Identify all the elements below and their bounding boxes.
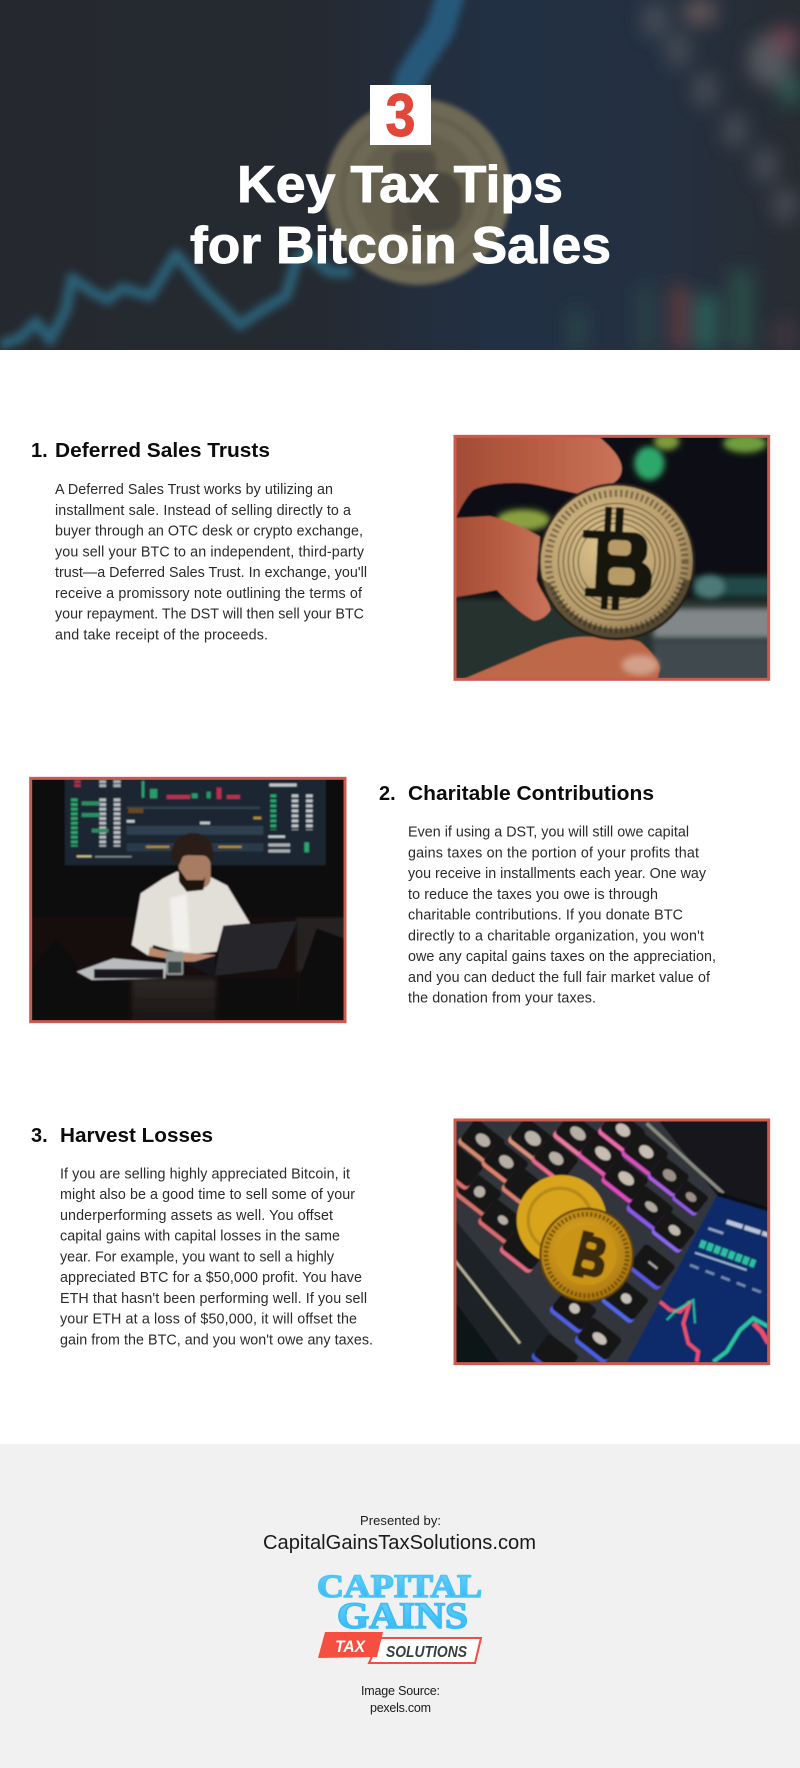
text block: tip 3 body: capital gains with capital losses in the same [60, 1229, 340, 1245]
title: Key Tax Tips [237, 156, 563, 214]
text block: tip 2 body: directly to a charitable organization, you won't [408, 928, 704, 944]
text: image source: pexels.com [370, 1701, 431, 1715]
text block: tip 2 body: the donation from your taxes. [408, 991, 596, 1007]
text block: tip 2 body [408, 824, 716, 1007]
logo: Capital Gains Tax Solutions: TAX [335, 1637, 367, 1656]
text block: tip 3 body: year. For example, you want to sell a highly [60, 1249, 335, 1265]
image: blurred bokeh ticker dots [641, 0, 800, 223]
text block: tip 1 body: receive a promissory note outlining the terms of [55, 586, 362, 602]
heading: tip 3: Harvest Losses [60, 1125, 213, 1147]
image: hand holding bitcoin [454, 434, 770, 681]
logo: Capital Gains Tax Solutions: GAINS [337, 1596, 468, 1637]
text block: tip 1 body: your repayment. The DST will then sell your BTC [55, 607, 364, 623]
heading: tip 1: Deferred Sales Trusts [55, 440, 270, 462]
text block: tip 1 body: and take receipt of the proceeds. [55, 627, 268, 643]
panel: tip 1 text [31, 440, 367, 643]
text block: tip 2 body: owe any capital gains taxes on the appreciation, [408, 949, 716, 965]
image: blurred candlesticks [570, 270, 795, 350]
panel: tip 3 text [31, 1125, 373, 1348]
text block: tip 3 body: ETH that hasn't been performing well. If you sell [60, 1291, 367, 1307]
text block: tip 3 body: might also be a good time to sell some of your [60, 1187, 355, 1203]
chart line: blurred blue market trace [0, 0, 452, 345]
panel: hero header [0, 0, 800, 350]
text block: tip 1 body: trust—a Deferred Sales Trust. In exchange, you'll [55, 565, 367, 581]
icon group: keyboard keys [435, 1108, 709, 1381]
text block: tip 2 body: to reduce the taxes you owe is through [408, 887, 658, 903]
image: man at laptop with trading screen [23, 772, 353, 1028]
heading: tip 2: Charitable Contributions [408, 783, 654, 805]
monitor: trading data [74, 782, 309, 857]
text block: tip 1 body: you sell your BTC to an independent, third-party [55, 544, 365, 560]
panel: tip 2 text [379, 783, 716, 1007]
title [190, 156, 611, 275]
heading: tip 3: 3. [31, 1125, 48, 1147]
panel: footer [0, 1444, 800, 1768]
text: image source: Image Source: [361, 1684, 440, 1698]
image: bitcoin on backlit keyboard with phone [454, 1118, 770, 1366]
text block: tip 1 body: A Deferred Sales Trust works by utilizing an [55, 482, 333, 498]
icon: bitcoin mark on coin [579, 506, 655, 612]
image: blurred bitcoin coin [325, 99, 511, 285]
text block: tip 2 body: Even if using a DST, you will still owe capital [408, 824, 689, 840]
text block: tip 3 body: gain from the BTC, and you won't owe any taxes. [60, 1332, 373, 1348]
text block: tip 1 body [55, 482, 367, 643]
text block: tip 2 body: gains taxes on the portion of your profits that [408, 845, 699, 861]
badge: number 3 [370, 82, 431, 149]
text block: tip 1 body: buyer through an OTC desk or crypto exchange, [55, 524, 363, 540]
heading: tip 1: 1. [31, 440, 48, 462]
text block: tip 1 body: installment sale. Instead of selling directly to a [55, 503, 351, 519]
badge: number 3: 3 [386, 82, 416, 149]
text: presented by: Presented by: [360, 1513, 441, 1528]
text block: tip 3 body: If you are selling highly appreciated Bitcoin, it [60, 1166, 350, 1182]
logo: Capital Gains Tax Solutions: CAPITAL [317, 1569, 482, 1605]
text block: tip 3 body [60, 1166, 373, 1348]
text block: tip 2 body: and you can deduct the full fair market value of [408, 970, 710, 986]
text block: tip 3 body: underperforming assets as well. You offset [60, 1208, 333, 1224]
text block: tip 2 body: you receive in installments each year. One way [408, 866, 707, 882]
heading: tip 2: 2. [379, 783, 396, 805]
text block: tip 2 body: charitable contributions. If you donate BTC [408, 908, 683, 924]
text: image source [361, 1684, 440, 1715]
text: website: CapitalGainsTaxSolutions.com [263, 1532, 536, 1554]
phone screen with chart [626, 1192, 768, 1362]
title: for Bitcoin Sales [190, 217, 611, 275]
logo: Capital Gains Tax Solutions [317, 1569, 482, 1663]
text block: tip 3 body: your ETH at a loss of $50,000, it will offset the [60, 1312, 357, 1328]
icon: gold coins [517, 1175, 634, 1302]
text block: tip 3 body: appreciated BTC for a $50,000 profit. You have [60, 1270, 362, 1286]
logo: Capital Gains Tax Solutions: SOLUTIONS [386, 1644, 467, 1661]
